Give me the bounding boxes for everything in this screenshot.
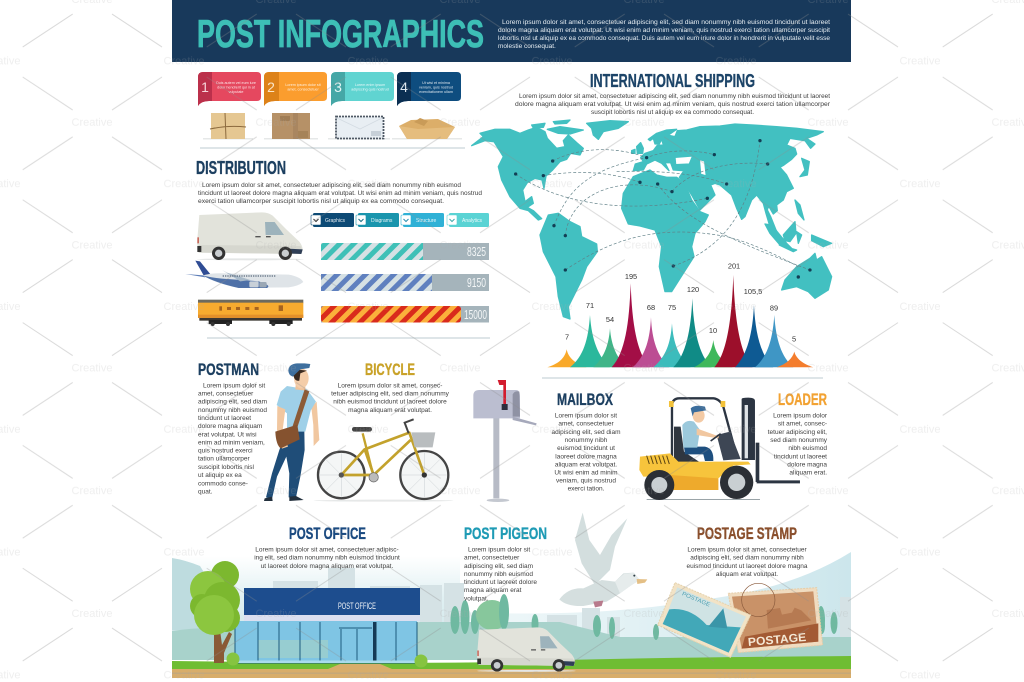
distribution heading: DISTRIBUTION — [196, 158, 286, 178]
distribution text: tincidunt ut laoreet dolore magna aliquam erat volutpat. Ut wisi enim ad minim veniam, quis nostrud — [198, 190, 482, 197]
chart values: 105,5 — [744, 287, 762, 296]
icon: delivery van — [197, 212, 304, 260]
australia — [782, 253, 832, 298]
bar: 9150 — [321, 274, 489, 291]
forklift — [639, 398, 800, 500]
peak: 7 — [547, 349, 587, 367]
eurasia — [633, 124, 823, 232]
grass — [172, 656, 851, 670]
postage stamp text — [686, 546, 808, 578]
postman heading: POSTMAN — [198, 361, 259, 379]
tab: analytics — [447, 213, 489, 227]
postman text: quat. — [198, 488, 213, 496]
loader text: Lorem ipsum dolor — [773, 412, 828, 420]
bar: 8325: 8325 — [467, 244, 486, 259]
road — [172, 669, 851, 678]
title: POST INFOGRAPHICS — [197, 13, 484, 56]
icon: cardboard box — [264, 113, 318, 140]
bottom landscape — [172, 552, 851, 678]
chart values: 68 — [647, 303, 655, 312]
numbered callouts — [198, 72, 461, 106]
mailbox text: adipiscing elit, sed diam — [551, 429, 621, 436]
post pigeon text: tincidunt ut laoreet dolore — [464, 579, 537, 586]
postman text — [198, 382, 267, 496]
second van — [477, 627, 576, 672]
postman text: adipiscing elit, sed diam — [198, 399, 267, 406]
international shipping text: dolore magna aliquam erat volutpat. Ut wisi enim ad minim veniam, quis nostrud exerci tation ullamcorper — [515, 101, 831, 108]
postman text: nonummy nibh euismod — [198, 407, 267, 414]
mailbox text: amet, consectetuer — [558, 421, 614, 428]
postman text: commodo conse- — [198, 480, 248, 487]
postman text: amet, consectetuer — [198, 390, 254, 398]
north america — [472, 127, 583, 220]
mailbox text: veniam, quis nostrud — [556, 478, 616, 485]
international shipping text: Lorem ipsum dolor sit amet, consectetuer adipiscing elit, sed diam nonummy nibh euismod tincidunt ut laoreet — [519, 93, 830, 100]
teal stamp — [658, 583, 751, 657]
peak: 201 — [714, 275, 753, 367]
americas and greenland — [472, 120, 628, 319]
loader text: sed diam nonummy — [770, 437, 828, 444]
peak: 89 — [755, 315, 793, 367]
post office text: ut laoreet dolore magna aliquam erat volutpat. — [261, 563, 393, 570]
peak: 105,5 — [735, 305, 773, 367]
post office text — [254, 546, 400, 570]
callout 3: Lorem enim ipsum — [355, 83, 385, 87]
callout 3: 3 — [334, 79, 342, 95]
callout 2 — [264, 72, 327, 106]
pigeon — [559, 513, 647, 607]
peak: 10 — [694, 340, 733, 367]
background trees — [450, 594, 838, 640]
post pigeon text: amet, consectetuer — [464, 554, 520, 562]
mailbox text: aliquam erat volutpat. — [555, 461, 617, 468]
post office building — [235, 588, 420, 663]
brown stamp: POSTAGE — [747, 631, 807, 649]
callout 4: 4 — [400, 79, 408, 95]
stamps — [658, 583, 823, 657]
international shipping heading: INTERNATIONAL SHIPPING — [590, 71, 755, 91]
greenland — [587, 121, 628, 139]
peak: 71 — [570, 315, 610, 367]
chart values: 120 — [687, 285, 699, 294]
middle land — [172, 622, 851, 660]
callout 3: adipiscing quis nostrud — [351, 88, 389, 92]
post pigeon text: nonummy nibh euismod — [464, 571, 533, 578]
postman text: ut aliquip ex ea — [198, 472, 242, 479]
international shipping text — [515, 93, 831, 116]
icon: tied parcel — [203, 113, 253, 140]
postage stamp text: Lorem ipsum dolor sit amet, consectetuer — [687, 546, 807, 554]
parcels row — [203, 113, 462, 140]
distribution text: exerci tation ullamcorper suscipit lobortis nisl ut aliquip ex ea commodo consequat. — [198, 198, 444, 205]
africa — [622, 170, 708, 292]
distribution text — [198, 182, 482, 205]
postman text: tation ullamcorper — [198, 456, 250, 463]
shipping routes — [516, 141, 810, 270]
bar: 9150: 9150 — [467, 275, 486, 290]
bar: 8325 — [321, 243, 489, 260]
loader text: tincidunt ut laoreet — [774, 453, 827, 460]
mailbox text: laoreet dolore magna — [555, 453, 617, 460]
postman text: suscipit lobortis nisl — [198, 464, 255, 471]
post pigeon text: volutpat. — [464, 595, 489, 602]
chart values: 71 — [586, 301, 594, 310]
post pigeon text — [464, 546, 537, 602]
loader text: dolore magna — [787, 461, 827, 468]
peak chart — [547, 275, 813, 367]
teal stamp: POSTAGE — [681, 591, 711, 609]
chart values: 10 — [709, 326, 717, 335]
bar chart — [321, 243, 489, 322]
chart values: 201 — [728, 262, 740, 270]
icon: train wagon — [198, 300, 303, 326]
peak: 75 — [653, 323, 691, 367]
peak: 195 — [612, 283, 650, 367]
loader text — [768, 412, 828, 476]
callout 1: 1 — [201, 79, 209, 95]
postage stamp text: aliquam erat volutpat. — [716, 571, 778, 578]
sign board — [244, 588, 420, 615]
chart values — [565, 262, 796, 344]
postage stamp text: euismod tincidunt ut laoreet dolore magna — [686, 563, 808, 570]
peak: 54 — [593, 328, 627, 367]
postman text: enim ad minim veniam, — [198, 440, 265, 446]
postage stamp text: adipiscing elit, sed diam nonummy nibh — [690, 554, 804, 562]
route dots — [514, 139, 812, 279]
callout 1: vulputate — [229, 90, 243, 94]
callout 4 — [397, 72, 461, 106]
old world — [622, 124, 832, 298]
chart values: 7 — [565, 332, 569, 342]
callout 1: dolor hendrerit qui in at — [217, 86, 255, 90]
chart values: 89 — [770, 304, 778, 312]
bicycle heading: BICYCLE — [365, 361, 415, 379]
scandinavia and uk — [632, 129, 677, 153]
chart values: 195 — [625, 272, 637, 281]
mailbox text — [551, 412, 621, 493]
header description — [498, 19, 830, 50]
postman text: tincidunt ut laoreet — [198, 415, 251, 422]
international shipping text: suscipit lobortis nisl ut aliquip ex ea commodo consequat. — [591, 109, 754, 116]
callout 4: exercitationem ullam — [419, 90, 453, 94]
callout 2: amet, consectetuer — [287, 88, 319, 92]
post pigeon text: adipiscing elit, sed diam — [464, 563, 533, 570]
bicycle text: Lorem ipsum dolor sit amet, consec- — [338, 382, 442, 390]
post office text: Lorem ipsum dolor sit amet, consectetuer adipisc- — [255, 546, 399, 554]
header banner — [172, 0, 851, 62]
postman text: Lorem ipsum dolor sit — [203, 382, 265, 390]
post pigeon heading: POST PIGEON — [464, 525, 547, 543]
skyline — [273, 568, 851, 638]
bicycle text: nibh euismod tincidunt ut laoreet dolore — [333, 399, 447, 406]
loader heading: LOADER — [778, 391, 827, 409]
callout 1: Duis autem vel eum iure — [216, 81, 256, 85]
callout 4: Ut wisi et minima — [422, 81, 451, 85]
asian islands — [765, 158, 832, 252]
postman text: erat volutpat. Ut wisi — [198, 431, 257, 438]
loader text: aliquam erat. — [789, 469, 827, 476]
post office text: ing elit, sed diam nonummy nibh euismod tincidunt — [254, 554, 400, 562]
loader text: sit amet, consec- — [778, 421, 827, 428]
post pigeon text: magna aliquam erat — [464, 587, 522, 594]
callout 2: 2 — [267, 79, 275, 95]
icon: airplane — [185, 261, 303, 288]
far hills — [172, 556, 460, 640]
header description: Lorem ipsum dolor sit amet, consectetuer adipiscing elit, sed diam nonummy nibh euismod tincidunt ut laoreet — [502, 19, 830, 26]
tab: diagrams — [356, 213, 399, 227]
tabs legend — [311, 213, 489, 227]
chart values: 5 — [792, 334, 796, 344]
postman text: quis nostrud exerci — [198, 448, 253, 454]
mailbox — [473, 380, 537, 502]
tree — [190, 561, 428, 668]
chart values: 75 — [668, 303, 676, 312]
callout 1 — [198, 72, 261, 106]
icon: open box — [392, 118, 462, 140]
loader text: tetuer adipiscing elit, — [768, 429, 827, 436]
header description: molestie consequat. — [498, 43, 556, 50]
south america — [540, 213, 597, 319]
sign text: POST OFFICE — [338, 601, 376, 612]
loader text: nibh euismod — [788, 445, 827, 452]
postage stamp heading: POSTAGE STAMP — [697, 525, 797, 543]
arctic islands — [532, 120, 583, 134]
tab: graphics — [311, 213, 354, 227]
postman text: dolore magna aliquam — [198, 423, 262, 430]
header description: dolore magna aliquam erat volutpat. Ut wisi enim ad minim veniam, quis nostrud exerci tation ullamcorper suscipit — [498, 27, 830, 34]
tab: structure — [401, 213, 444, 227]
callout 4: veniam, quis nostrud — [419, 86, 453, 90]
bicycle text: magna aliquam erat volutpat. — [348, 407, 432, 414]
world map — [472, 120, 832, 319]
brown stamp — [728, 583, 823, 653]
peak: 120 — [673, 298, 712, 367]
tab: diagrams: Diagrams — [371, 218, 393, 224]
chart values: 54 — [606, 315, 614, 324]
distribution text: Lorem ipsum dolor sit amet, consectetuer adipiscing elit, sed diam nonummy nibh euismod — [202, 182, 461, 189]
icon: envelope — [328, 116, 390, 140]
bicycle — [314, 419, 454, 502]
tab: graphics: Graphics — [325, 218, 346, 224]
post pigeon text: Lorem ipsum dolor sit — [468, 546, 530, 554]
bar: 15000: 15000 — [464, 307, 487, 322]
mailbox text: Lorem ipsum dolor sit — [555, 412, 617, 420]
mailbox heading: MAILBOX — [557, 391, 613, 409]
mailbox text: nonummy nibh — [565, 437, 608, 444]
mailbox text: euismod tincidunt ut — [557, 445, 615, 452]
postman figure — [264, 363, 319, 501]
tab: structure: Structure — [416, 218, 437, 224]
tab: analytics: Analytics — [462, 218, 483, 224]
bicycle text: tetuer adipiscing elit, sed diam nonummy — [331, 390, 450, 398]
peak: 5 — [777, 352, 813, 367]
bar: 15000 — [321, 306, 489, 322]
post office heading: POST OFFICE — [289, 525, 366, 543]
peak: 68 — [633, 317, 669, 367]
bicycle text — [331, 382, 450, 414]
mailbox text: exerci tation. — [568, 486, 605, 493]
header description: lobortis nisl ut aliquip ex ea commodo consequat. Duis autem vel eum iriure dolor in hendrerit in vulputate velit esse — [498, 35, 830, 42]
callout 2: Lorem ipsum dolor sit — [285, 83, 321, 87]
callout 3 — [331, 72, 394, 106]
mailbox text: Ut wisi enim ad minim — [554, 469, 618, 476]
